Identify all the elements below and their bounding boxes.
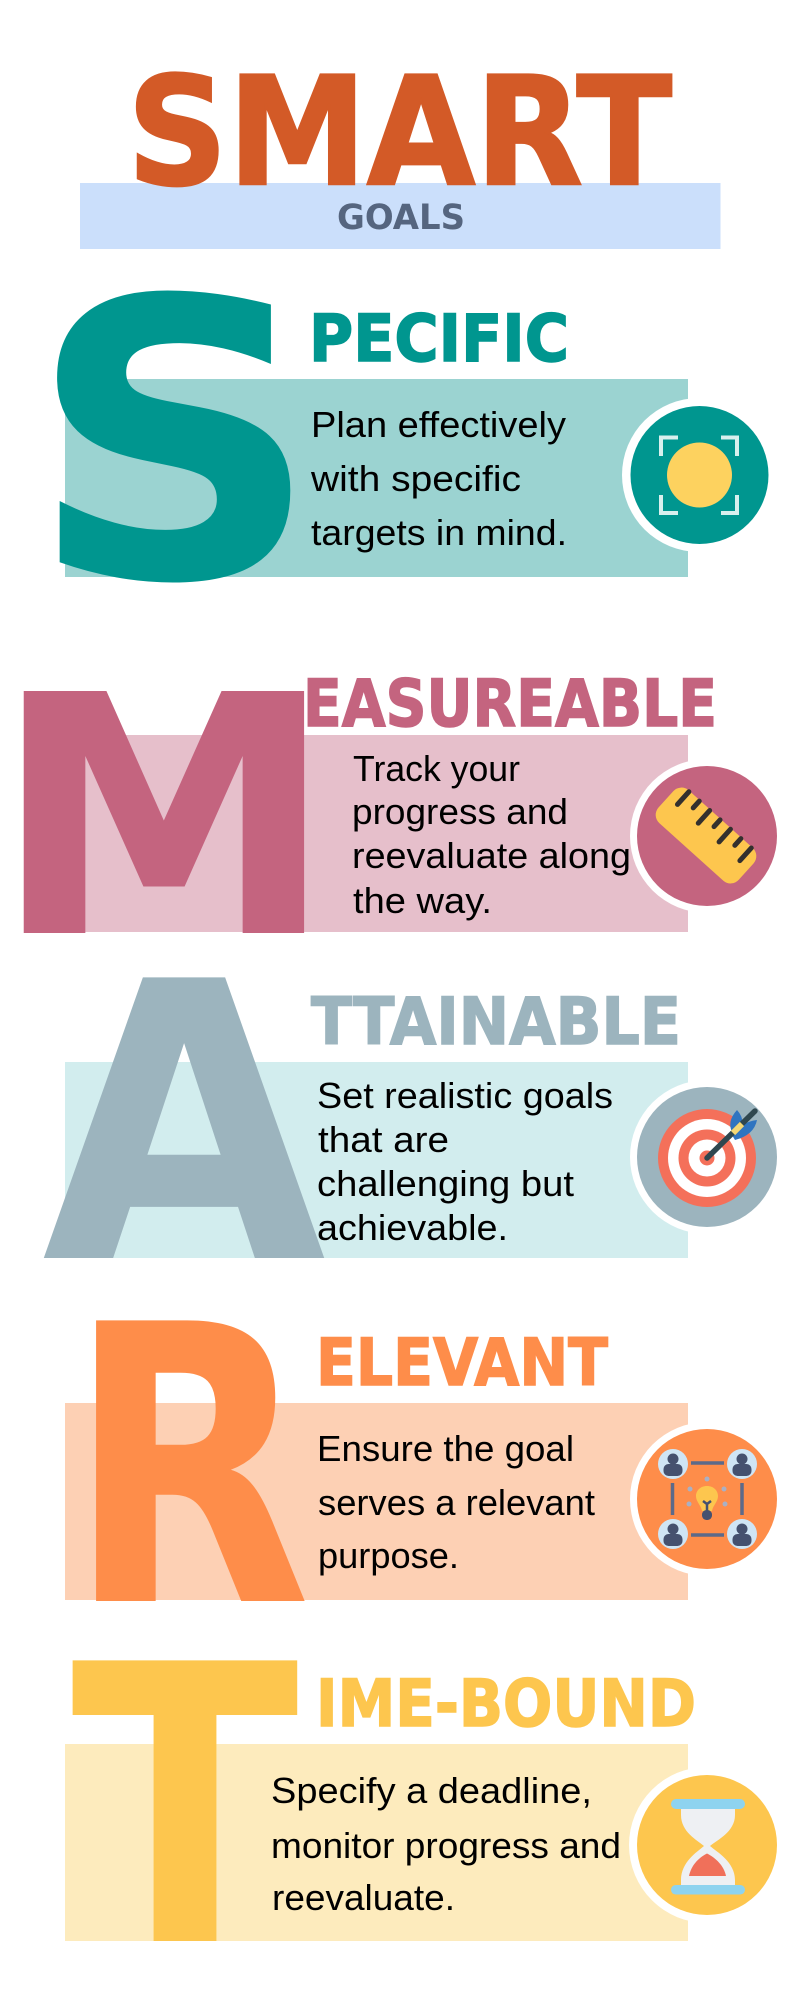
body text xyxy=(352,748,631,921)
body text: Ensure the goal xyxy=(317,1428,574,1469)
big letter R: R xyxy=(67,1244,311,1692)
body text: progress and xyxy=(352,791,568,832)
title block xyxy=(80,46,720,249)
section: Attainable xyxy=(42,901,784,1349)
body text xyxy=(271,1770,621,1918)
body text: with specific xyxy=(310,458,521,499)
big letter S: S xyxy=(28,220,320,669)
subtitle: GOALS: GOALS xyxy=(337,198,465,238)
section: Measureable xyxy=(0,626,784,1012)
body text: Plan effectively xyxy=(311,404,566,445)
title: SMART: SMART xyxy=(127,46,672,220)
panel background xyxy=(65,735,688,932)
panel background xyxy=(65,379,688,577)
icon: ruler xyxy=(630,759,784,913)
body text: targets in mind. xyxy=(311,512,567,553)
panel background xyxy=(65,1403,688,1600)
icon: hourglass xyxy=(629,1767,785,1923)
body text: reevaluate along xyxy=(352,835,631,876)
body text: achievable. xyxy=(317,1207,508,1248)
heading: EASUREABLE xyxy=(303,667,717,742)
body text: challenging but xyxy=(317,1163,574,1204)
body text xyxy=(317,1428,595,1576)
body text: monitor progress and xyxy=(271,1825,621,1866)
panel background xyxy=(65,1744,688,1941)
body text xyxy=(317,1075,613,1248)
body text: Track your xyxy=(353,748,520,789)
body text: the way. xyxy=(353,880,492,921)
heading: PECIFIC xyxy=(309,302,569,377)
heading: TTAINABLE xyxy=(311,985,681,1060)
body text: purpose. xyxy=(318,1535,459,1576)
body text: Specify a deadline, xyxy=(271,1770,592,1811)
subtitle bar xyxy=(80,183,720,249)
body text: serves a relevant xyxy=(318,1482,595,1523)
body text: reevaluate. xyxy=(272,1877,455,1918)
section: Time-bound xyxy=(65,1584,785,2000)
section: Specific xyxy=(28,220,776,669)
panel background xyxy=(65,1062,688,1258)
big letter A: A xyxy=(42,901,329,1349)
body text: that are xyxy=(318,1119,449,1160)
icon: team and idea xyxy=(630,1422,784,1576)
body text xyxy=(310,404,567,553)
heading: ELEVANT xyxy=(316,1326,608,1401)
body text: Set realistic goals xyxy=(317,1075,613,1116)
big letter M: M xyxy=(0,626,336,1012)
icon: dartboard xyxy=(630,1080,784,1234)
section: Relevant xyxy=(65,1244,784,1692)
icon: focus target xyxy=(622,398,776,552)
heading: IME-BOUND xyxy=(316,1667,696,1742)
